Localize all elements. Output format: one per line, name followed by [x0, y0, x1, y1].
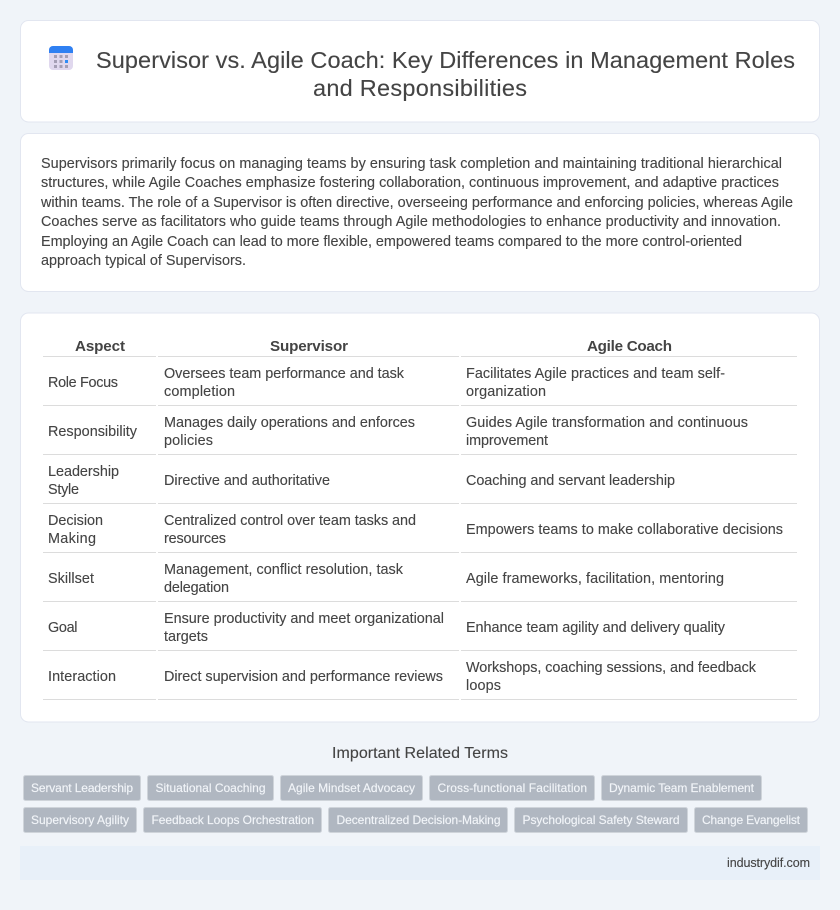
title: Supervisor vs. Agile Coach: Key Differences in Management Roles: [96, 47, 795, 73]
row: decision making: Decision: [48, 513, 103, 529]
intro paragraph: Coaches serve as facilitators who guide teams through Agile methodologies to enhance productivity and innovation.: [41, 214, 781, 230]
icon: calendar: [49, 46, 73, 70]
tag: servant leadership: [24, 776, 140, 800]
row: skillset: Management, conflict resolution, task: [164, 562, 404, 578]
intro paragraph: Employing an Agile Coach can lead to more flexible, empowered teams compared to the more control-oriented: [41, 234, 742, 250]
row: leadership style: Coaching and servant leadership: [466, 473, 675, 489]
tag: dynamic team enablement: [602, 776, 762, 800]
tag: feedback loops orchestration: Feedback Loops Orchestration: [152, 813, 314, 827]
header panel: [20, 20, 820, 122]
row: decision making: resources: [164, 531, 226, 547]
row: responsibility: Responsibility: [48, 424, 138, 440]
row: role focus: organization: [466, 384, 546, 400]
table header row: [43, 338, 797, 357]
tag: situational coaching: Situational Coaching: [156, 781, 266, 795]
tag: supervisory agility: Supervisory Agility: [31, 813, 129, 827]
row: interaction: loops: [466, 678, 501, 694]
table header row: Aspect: [75, 338, 125, 355]
row: goal: targets: [164, 629, 208, 645]
table header row: Supervisor: [270, 338, 348, 355]
row: goal: Goal: [48, 620, 78, 636]
row: goal: Enhance team agility and delivery quality: [466, 620, 726, 636]
row: interaction: Direct supervision and performance reviews: [164, 669, 443, 685]
row: responsibility: Manages daily operations and enforces: [164, 415, 415, 431]
intro paragraph: Supervisors primarily focus on managing teams by ensuring task completion and maintaining traditional hierarchical: [41, 156, 782, 172]
row: decision making: Making: [48, 531, 96, 547]
row: role focus: completion: [164, 384, 235, 400]
row: skillset: Agile frameworks, facilitation, mentoring: [466, 571, 724, 587]
tag: psychological safety steward: [514, 808, 688, 832]
row: role focus: [43, 366, 797, 406]
panel: introduction text: [20, 134, 820, 292]
intro paragraph: structures, while Agile Coaches emphasize fostering collaboration, continuous improvement, and adaptive practices: [41, 175, 779, 191]
title: [96, 47, 795, 101]
tag: agile mindset advocacy: Agile Mindset Advocacy: [288, 781, 415, 795]
tag: decentralized decision-making: [328, 808, 508, 832]
row: responsibility: improvement: [466, 433, 548, 449]
row: decision making: Empowers teams to make collaborative decisions: [466, 522, 783, 538]
row: interaction: Interaction: [48, 669, 116, 685]
tag: servant leadership: Servant Leadership: [31, 781, 133, 795]
tag list: related terms: [24, 776, 808, 832]
title: and Responsibilities: [313, 75, 527, 101]
panel: comparison table: [20, 313, 820, 722]
tag: cross-functional facilitation: Cross-functional Facilitation: [438, 781, 587, 795]
tag: cross-functional facilitation: [430, 776, 594, 800]
row: leadership style: Directive and authoritative: [164, 473, 330, 489]
tag: change evangelist: [694, 808, 808, 832]
row: leadership style: Style: [48, 482, 79, 498]
tag: agile mindset advocacy: [280, 776, 422, 800]
row: skillset: delegation: [164, 580, 229, 596]
row: role focus: Role Focus: [48, 375, 118, 391]
tag: dynamic team enablement: Dynamic Team Enablement: [609, 781, 755, 795]
footer bar: [20, 846, 820, 880]
tag: psychological safety steward: Psychological Safety Steward: [522, 813, 680, 827]
intro paragraph: within teams. The role of a Supervisor is often directive, overseeing performance and enforcing policies, whereas Agile: [40, 195, 793, 211]
tag: decentralized decision-making: Decentralized Decision-Making: [336, 813, 500, 827]
row: leadership style: [43, 464, 797, 504]
intro paragraph: approach typical of Supervisors.: [41, 253, 246, 269]
row: goal: [43, 611, 797, 651]
row: skillset: Skillset: [48, 571, 94, 587]
row: goal: Ensure productivity and meet organizational: [164, 611, 444, 627]
intro paragraph: [40, 156, 793, 269]
row: responsibility: Guides Agile transformation and continuous: [466, 415, 748, 431]
row: skillset: [43, 562, 797, 602]
row: interaction: Workshops, coaching sessions, and feedback: [466, 660, 757, 676]
heading: important related terms: Important Related Terms: [332, 745, 508, 762]
tag: supervisory agility: [24, 808, 136, 832]
table header row: Agile Coach: [587, 338, 672, 355]
row: responsibility: [43, 415, 797, 455]
footer bar: industrydif.com: [727, 856, 810, 870]
row: responsibility: policies: [164, 433, 213, 449]
row: role focus: Facilitates Agile practices and team self-: [466, 366, 725, 382]
tag: situational coaching: [148, 776, 274, 800]
tag: change evangelist: Change Evangelist: [702, 813, 801, 827]
row: interaction: [43, 660, 797, 700]
row: leadership style: Leadership: [48, 464, 119, 480]
row: decision making: Centralized control over team tasks and: [164, 513, 416, 529]
row: role focus: Oversees team performance and task: [164, 366, 405, 382]
tag: feedback loops orchestration: [144, 808, 322, 832]
row: decision making: [43, 513, 797, 553]
